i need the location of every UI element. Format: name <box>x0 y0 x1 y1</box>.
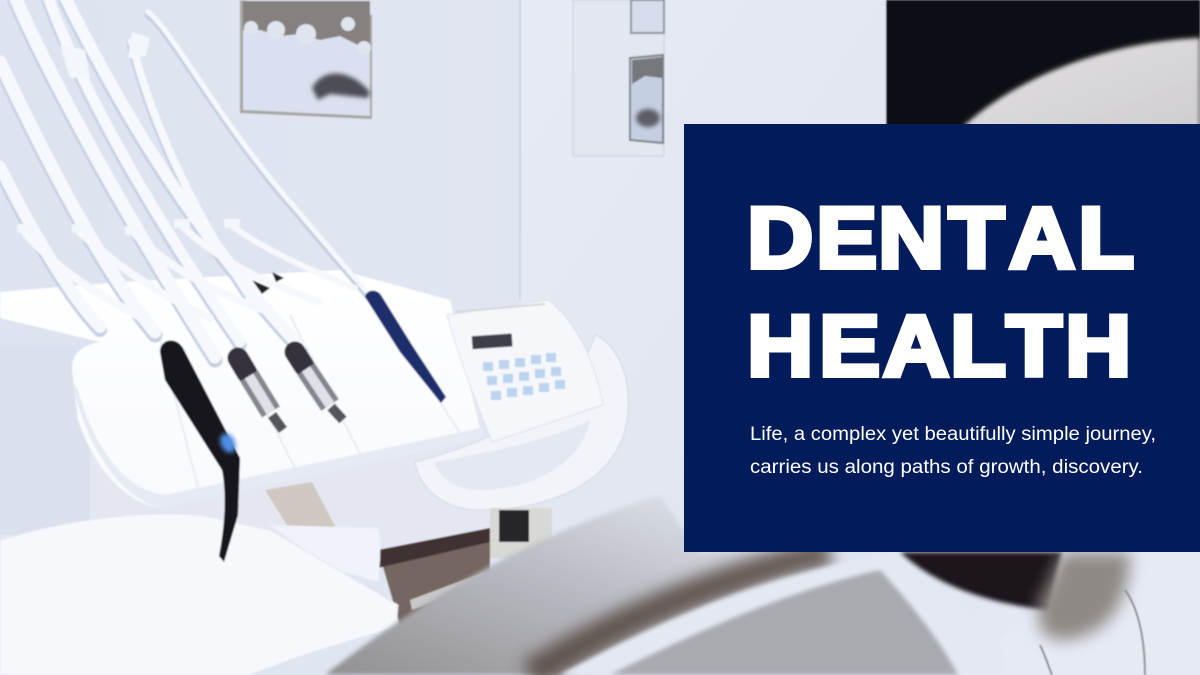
handpiece: metal 1 <box>238 358 283 430</box>
heading: dental health: DENTAL <box>747 190 1134 286</box>
handpiece: dark blue pen <box>365 291 446 403</box>
heading: dental health: HEALTH <box>747 298 1131 394</box>
blurred chair foreground <box>325 496 1200 675</box>
floor <box>378 528 490 625</box>
keypad control panel <box>447 300 603 442</box>
side chair / stool <box>415 335 628 558</box>
main instrument tray <box>0 270 482 508</box>
heading: dental health <box>747 190 1134 394</box>
text block: description: carries us along paths of growth, discovery. <box>750 457 1143 478</box>
tray support stem <box>265 482 338 532</box>
framed picture on wall <box>240 0 372 119</box>
blurred headrest top right <box>965 38 1200 130</box>
handpiece: metal 2 <box>295 352 343 420</box>
wall mirror with small pictures <box>573 0 664 156</box>
panel: title card <box>684 124 1200 552</box>
handpiece: black scaler <box>160 340 240 562</box>
text block: description: Life, a complex yet beautifully simple journey, <box>750 424 1156 445</box>
text block: description <box>750 424 1156 478</box>
dark monitor top right <box>886 0 1200 130</box>
lower tray <box>0 514 398 675</box>
tubing <box>0 0 368 360</box>
